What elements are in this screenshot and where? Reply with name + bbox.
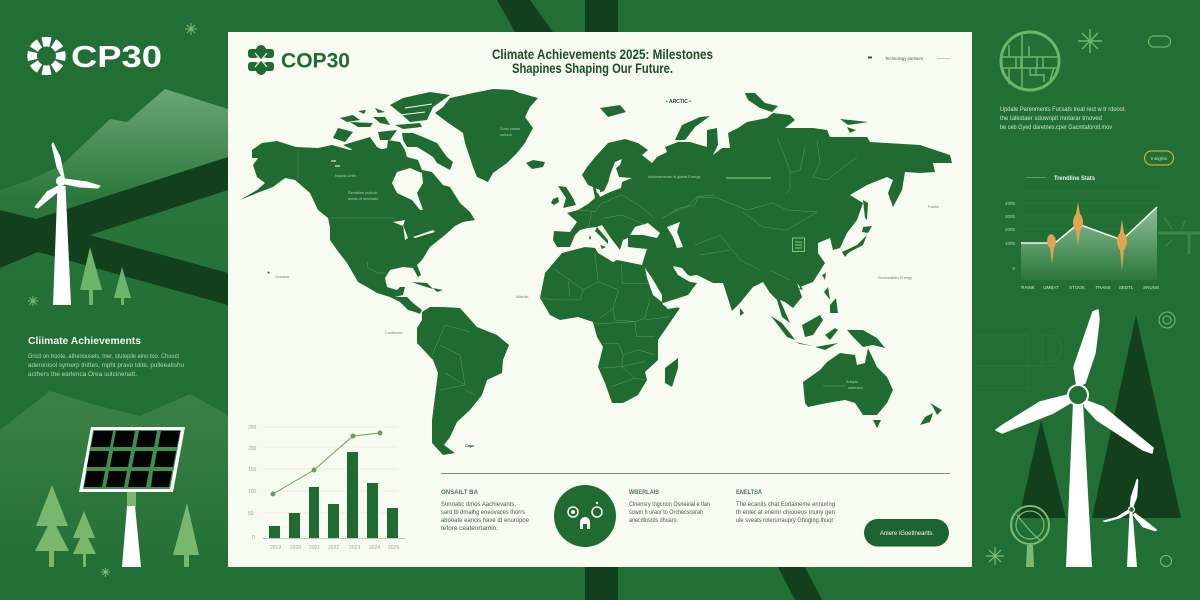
bar and line chart: 0 [252, 535, 255, 541]
marker [1047, 234, 1056, 264]
bar and line chart: 2022 [328, 545, 339, 551]
map labels on sea: • ARCTIC • [666, 99, 691, 105]
bar and line chart: 2019 [270, 545, 281, 551]
text column one: abooate eancis have dt enuropoe [441, 517, 529, 524]
text column three: The ecanits chat Eorlaineme ennuring [736, 501, 835, 508]
text column two: WBERLAIS [629, 489, 659, 496]
map labels on land: Renables outlook [348, 191, 377, 195]
bar and line chart: 250 [248, 425, 257, 431]
British Isles [551, 186, 576, 208]
icon: circular map [1001, 32, 1059, 90]
legend top right [868, 56, 950, 61]
text column one: tefore ceateortamin. [441, 525, 498, 532]
legend top right: Technology partners [885, 56, 924, 61]
CP30 logo [27, 37, 162, 75]
heading: Cliimate Achievements [28, 335, 141, 347]
faint connector marks [1158, 217, 1200, 254]
button: Aniere iGoetlnearlts. [880, 530, 934, 537]
icon: sparkle [28, 296, 38, 306]
text column two: sowm h uraor to Orchecscerah [629, 509, 703, 516]
area chart: SNUNS [1143, 285, 1159, 290]
paragraph: aderonisol symerp thittes, mpht pravo tdite, pulleeatishu [28, 362, 184, 369]
area chart: 3000 [1005, 214, 1015, 219]
marker [1073, 202, 1083, 246]
map labels on land: Adapta [846, 380, 859, 384]
CP30 logo: CP30 [71, 39, 162, 74]
dark tree [1092, 315, 1181, 518]
large wind turbine [996, 310, 1153, 567]
text column one: sard tb drnalhg eneovaces thorrs [441, 509, 525, 516]
icon: sparkle [986, 547, 1004, 565]
orange pill label [1144, 151, 1174, 165]
dark tree [1019, 420, 1066, 518]
highlight line [726, 177, 771, 179]
Arctic islands [333, 92, 453, 170]
map labels on sea [268, 99, 939, 448]
pine tree [80, 247, 102, 305]
button [864, 519, 949, 546]
bar and line chart: 2024 [369, 545, 380, 551]
small wind turbine [1103, 479, 1157, 567]
area chart: SEDTL [1119, 285, 1134, 290]
map labels on land: Nascla Units [335, 174, 356, 178]
panel: left text block [28, 335, 184, 378]
marker [1117, 219, 1127, 270]
Australia [803, 348, 893, 415]
solar panel [79, 427, 185, 567]
North America [240, 140, 475, 314]
callout icon on China [792, 238, 804, 252]
icon: sparkle [1078, 29, 1102, 53]
area chart: UMBAT [1043, 285, 1059, 290]
area chart: 0 [1012, 266, 1015, 271]
text column three: th enler at enemr chiooeos Inuny gen [736, 509, 835, 516]
Iceland [526, 160, 545, 169]
pine tree [173, 503, 199, 567]
Italy [595, 227, 608, 244]
hills [0, 391, 228, 567]
map labels on land: Achievements of global Energy [648, 175, 700, 179]
text block: Update Parenments Fucsats treat rect w tr rduoot. [1000, 106, 1126, 113]
pine tree [73, 511, 96, 567]
map labels on sea: Caribbean [385, 331, 403, 335]
faint blueprint outline [975, 335, 1061, 388]
world map [240, 89, 952, 455]
orange pill label: Insights [1151, 156, 1168, 161]
South America [417, 307, 509, 455]
Eurasia [553, 113, 952, 323]
bar and line chart [248, 425, 405, 551]
bar and line chart: 50 [248, 511, 254, 517]
icon: magnifier tree [1011, 506, 1049, 567]
paragraph: acthers the earlenca Orea sutcinenatt. [28, 371, 137, 378]
map labels on sea: Atlantic [516, 295, 529, 299]
title [492, 47, 713, 76]
text column one: Sunnatic dmos Aachievants, [441, 501, 516, 508]
area chart: STOOK [1069, 285, 1085, 290]
mountain [0, 89, 228, 219]
panel: left landscape top [0, 23, 228, 330]
area chart [1005, 175, 1159, 290]
text column three: ule sveats rolerurraupry Ghoging Ihuot [736, 517, 833, 524]
bar and line chart: 150 [248, 467, 257, 473]
pine tree [35, 485, 69, 567]
icon: sparkle [101, 568, 110, 577]
paragraph: Gricit on troote, atheriousels, mer. stutepile eino too. Chouct [28, 353, 179, 360]
dark road bands [0, 157, 228, 305]
Tasmania and New Zealand [873, 403, 942, 428]
map labels on sea: Renewables Energy [878, 276, 912, 280]
text column two: anecdlosrds dhuaro. [629, 517, 678, 524]
country borders [298, 137, 857, 395]
bar and line chart: 2023 [349, 545, 360, 551]
islands [412, 93, 885, 387]
text block [1000, 106, 1126, 131]
seas and lakes [331, 148, 692, 309]
bar and line chart: 2025 [388, 545, 399, 551]
paragraph [28, 353, 184, 378]
panel: main card [228, 32, 972, 567]
lower ground [0, 190, 228, 330]
bar and line chart: 2021 [309, 545, 320, 551]
panel: left landscape bottom [0, 391, 228, 577]
map labels on land: Solar zones [500, 127, 520, 131]
text column one: ONSAILT BA [441, 489, 478, 496]
text column one [441, 489, 529, 532]
map labels on land: outlook [500, 133, 512, 137]
map labels on land [335, 127, 863, 390]
icon: circle badge [554, 485, 616, 547]
map labels on land: areas of renewals [348, 197, 378, 201]
icon: sparkle [185, 23, 197, 35]
COP30 logo [248, 45, 350, 75]
divider [441, 472, 950, 474]
text column two: Clnensry Ingcnon Osneeial e tlan [629, 501, 710, 508]
icon: circle badge [1159, 312, 1175, 328]
COP30 logo: COP30 [281, 50, 350, 72]
area chart: 1000 [1005, 241, 1015, 246]
title: Climate Achievements 2025: Milestones [492, 47, 713, 62]
text column three: ENELTSA [736, 489, 762, 496]
icon: circle badge [1160, 556, 1172, 566]
map labels on sea: Cape [465, 444, 474, 448]
pine tree [114, 267, 131, 305]
text column three [736, 489, 835, 524]
Greenland [435, 89, 538, 182]
text block: the talkstaer sdownpit motarar tmoved [1000, 115, 1102, 122]
area chart: 4000 [1005, 201, 1015, 206]
bar and line chart: 2020 [290, 545, 301, 551]
bar and line chart: 100 [248, 489, 257, 495]
wind turbine [35, 143, 100, 305]
area chart: Trendline Stats [1054, 175, 1095, 182]
Africa [540, 247, 680, 403]
bar and line chart: 200 [248, 446, 257, 452]
map labels on sea: Oceania [275, 275, 290, 279]
area chart: RAINK [1021, 285, 1035, 290]
panel: right side [975, 29, 1200, 567]
map labels on land: outreach [848, 386, 863, 390]
text column two [629, 489, 710, 524]
text block: be ceb Gyed daretnes.cper Gacmtaforotl.mov [1000, 124, 1113, 131]
area chart: 2000 [1005, 227, 1015, 232]
title: Shapines Shaping Our Future. [512, 61, 673, 76]
map labels on sea: Pacific [928, 205, 939, 209]
pill [1148, 36, 1170, 47]
area chart: TRANS [1095, 285, 1111, 290]
